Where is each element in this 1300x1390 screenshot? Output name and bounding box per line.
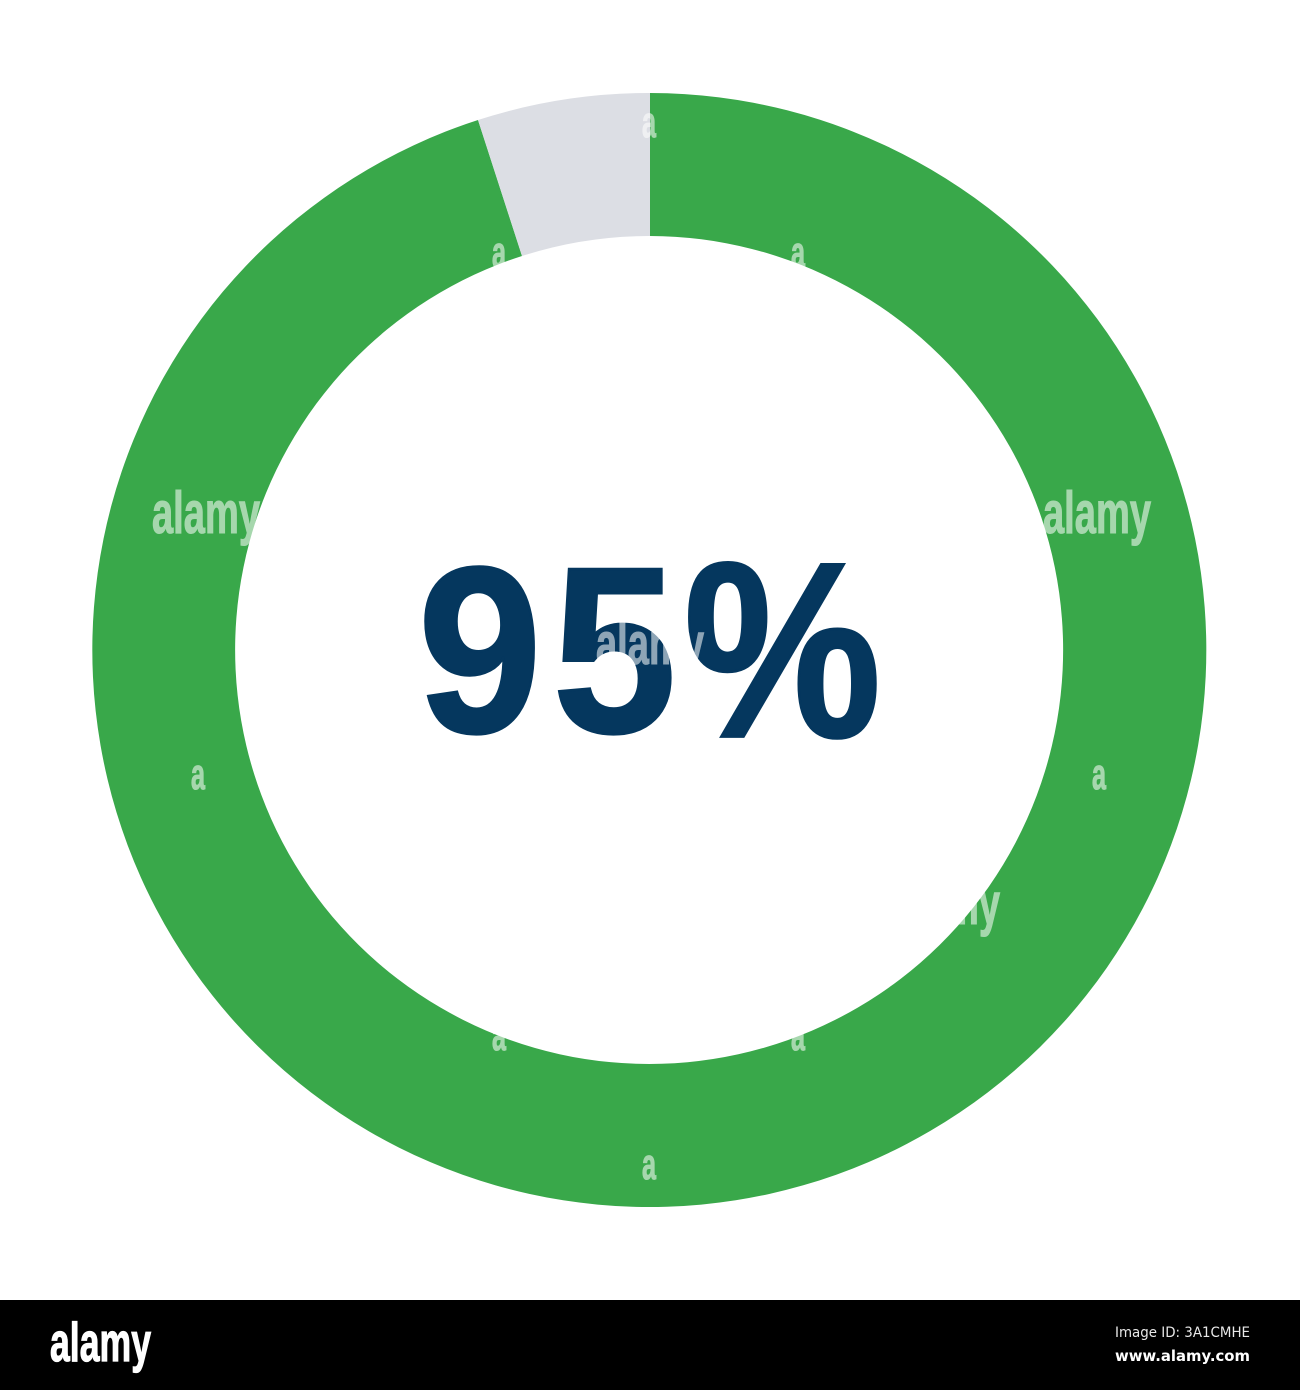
percentage value: 5 [552, 517, 677, 782]
footer logo: alamy [50, 1311, 151, 1373]
watermarks: a [492, 228, 506, 277]
donut chart: 95 percent [92, 93, 1206, 1207]
percentage value: % [684, 511, 881, 790]
watermarks: a [191, 750, 205, 799]
watermarks: a [642, 98, 656, 147]
watermarks: alamy [1043, 480, 1151, 546]
watermarks: alamy [152, 480, 260, 546]
watermarks: a [492, 1011, 506, 1060]
ring segment: remaining 5 percent grey [478, 93, 650, 256]
percentage value [418, 511, 881, 790]
watermarks: alamy [892, 871, 1000, 937]
footer bar [0, 1300, 1300, 1390]
watermarks: a [1092, 750, 1106, 799]
ring segment: 95 percent green [92, 93, 1206, 1207]
watermarks: a [791, 1011, 805, 1060]
watermarks [152, 98, 1151, 1189]
watermarks: alamy [596, 611, 704, 677]
watermarks: a [642, 1140, 656, 1189]
image id: Image ID: 3A1CMHE [1115, 1325, 1250, 1341]
percentage value: 9 [418, 517, 542, 782]
watermarks: a [791, 228, 805, 277]
website url: www.alamy.com [1115, 1347, 1250, 1365]
